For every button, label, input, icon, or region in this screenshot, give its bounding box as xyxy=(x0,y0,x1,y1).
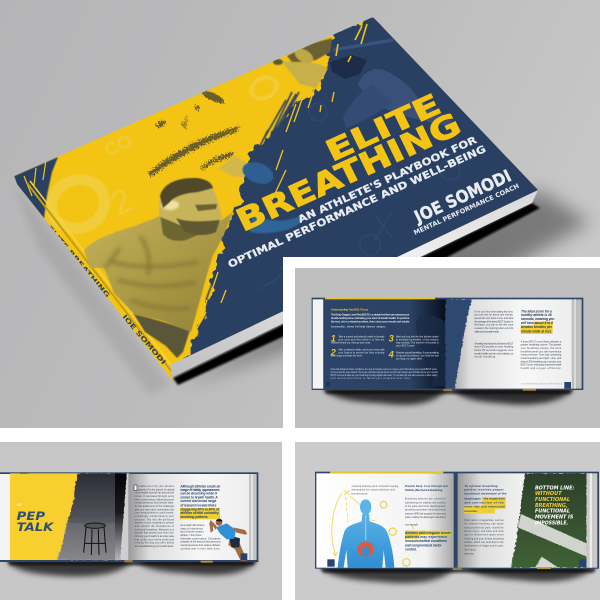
pull quote: comes to breath health. A xyxy=(180,495,218,499)
yellow brush streaks on navy xyxy=(196,24,367,330)
navy diagonal field xyxy=(170,17,560,375)
book shadow xyxy=(14,185,590,395)
bottom line statement: BREATHING, xyxy=(535,503,568,509)
highlight xyxy=(405,531,451,539)
left page sub-heading: Breathe Deep: Core Strength and xyxy=(405,485,448,488)
stool photo xyxy=(57,473,127,560)
right page second column xyxy=(521,340,562,370)
right page first column: the future, you can do the test once xyxy=(474,324,514,327)
left page body xyxy=(405,498,447,526)
trousers xyxy=(133,313,190,358)
hair xyxy=(160,178,213,208)
pull quote: The ideal score for a xyxy=(521,309,552,313)
left page note xyxy=(331,368,438,380)
right page second column: health and oxygen efficiency. xyxy=(521,367,562,370)
page stack xyxy=(249,474,257,560)
chapter number: 01 xyxy=(17,503,21,507)
cover subtitle: OPTIMAL PERFORMANCE AND WELL-BEING xyxy=(226,144,488,271)
right page body: pain to themselves upper-chest xyxy=(464,534,504,537)
page edge xyxy=(0,474,10,560)
author role: MENTAL PERFORMANCE COACH xyxy=(412,182,521,237)
highlight xyxy=(180,508,220,519)
pull quote: of research reveals that a xyxy=(180,503,217,507)
left page intro text: demanding the utmost patience and xyxy=(352,489,396,492)
numbered steps: After a relaxed exhale, pinch your nose with xyxy=(338,348,385,351)
dark line-art figure xyxy=(416,315,447,387)
body text column: with you may have overlooked the xyxy=(135,508,175,511)
footer: ELITE BREATHING | MENTAL PERFORMANCE xyxy=(521,382,563,385)
left page sub-heading xyxy=(405,485,448,492)
right page pull quote: diaphragm - the expansion xyxy=(464,496,505,500)
numbered steps: your nose and then allow it to flow out xyxy=(338,338,385,341)
chapter title xyxy=(17,509,55,534)
cover title xyxy=(236,93,461,232)
right page pull quote: pattern involves proper xyxy=(463,488,504,492)
right page first column: breath health and an over-reliance on xyxy=(474,352,514,355)
body text column: and overshadowing your performance. xyxy=(135,545,174,548)
body text column: infusing your breath to an elite state xyxy=(135,535,175,538)
spine title: ELITE BREATHING xyxy=(45,224,111,299)
navy slash xyxy=(445,299,472,389)
pull quote: musculoskeletal conditions xyxy=(405,539,447,543)
spray marks on yellow xyxy=(148,88,240,177)
spine author: JOE SOMODI xyxy=(120,312,168,366)
left folio xyxy=(326,382,330,387)
spine tabs xyxy=(453,568,462,570)
left page sub-heading: Stability (Mechanical Breathing) xyxy=(405,489,443,492)
left page body: maintaining the stability and mobility xyxy=(405,501,447,504)
numbered steps: too long; try again later. xyxy=(396,357,423,360)
folios xyxy=(327,559,586,567)
pull quote xyxy=(179,484,220,519)
faint gas symbols xyxy=(44,74,280,237)
right page pull quote: functional movement of the xyxy=(464,492,507,496)
faint gas symbols: 2 xyxy=(105,181,139,223)
right page body: hurdles, which can contribute to the xyxy=(464,541,504,544)
bottom line statement: FUNCTIONAL xyxy=(535,497,570,503)
second body text: athlete, I find these xyxy=(180,534,202,537)
blue ball under the title xyxy=(240,158,303,233)
numbered steps: is big and not relaxed, you held the test xyxy=(396,354,439,357)
right page highlight xyxy=(464,497,506,513)
book cover edge xyxy=(315,472,599,569)
stool xyxy=(84,523,106,555)
right page xyxy=(128,474,249,560)
left page heading: Understanding Your BOLT Score xyxy=(331,307,369,311)
right page second column: greater breathing volume. The greater xyxy=(521,344,561,347)
cover title: ELITE xyxy=(320,87,446,168)
numbered steps: 4 xyxy=(388,349,395,359)
shirt xyxy=(84,212,233,332)
runner xyxy=(209,519,247,561)
chapter title: TALK xyxy=(17,520,55,534)
upper blue athlete figure xyxy=(330,40,452,128)
right page body: heaving and poor airway breathing xyxy=(464,537,504,540)
numbered steps: may contract. The number of seconds is xyxy=(396,341,439,344)
book cover edge xyxy=(0,472,258,562)
bottom line statement: MOVEMENT IS xyxy=(535,515,574,521)
right page second column: during exercise. Over time, practicing xyxy=(521,354,562,357)
body text column: reathe life into your athletic xyxy=(138,485,175,488)
spread shadow xyxy=(320,567,597,583)
body text column: and unearth the foundations of xyxy=(135,525,174,528)
pull quote: minute while at rest. xyxy=(521,329,552,333)
right folio xyxy=(564,382,571,389)
left page note: BOLT score as it takes as your breathing is being signals decrease. Try not take the test after exercise or after eating xyxy=(331,374,438,377)
body text column: practice. Tap into the profound xyxy=(135,518,175,521)
body text column: comer. It resonates through every xyxy=(135,495,175,498)
navy left page xyxy=(323,299,447,389)
pull quote: Although athletes exude an xyxy=(179,484,220,488)
right page first column: below 20 seconds suggests poor xyxy=(474,349,513,352)
left page body: of the spine and trunk. Diaphragmatic xyxy=(405,505,447,508)
football field photo xyxy=(511,473,589,568)
right page pull quote: To optimal breathing xyxy=(464,484,498,488)
right page xyxy=(447,299,572,389)
cover subtitle: AN ATHLETE'S PLAYBOOK FOR xyxy=(296,135,479,226)
page stack xyxy=(587,473,597,568)
highlight xyxy=(521,322,553,334)
pull quote: patterns may experience xyxy=(404,535,447,539)
spine hinge xyxy=(27,183,172,372)
left page body: pressure (IAP) that supports the spine and xyxy=(405,512,446,515)
right page first column: the average of the three BOLT Scores. In xyxy=(474,320,514,323)
body text column: depths of your respiratory system xyxy=(135,522,174,525)
body text column: core irregularities in your breath, xyxy=(135,512,174,515)
pull quote xyxy=(404,531,451,552)
panel: Pep Talk spread xyxy=(0,428,295,600)
faint gas symbols: CO xyxy=(101,131,136,161)
cover subtitle xyxy=(226,135,488,271)
numbered steps: your fingers to prevent air from entering xyxy=(338,351,385,354)
left page intro: normally, then follow these steps: xyxy=(331,324,386,328)
left page body: core strength. xyxy=(405,523,419,526)
body text column: mental presence and mental state. xyxy=(135,502,174,505)
left page intro: breath-holding time, indicating your level of breath health. To perform xyxy=(331,316,410,320)
bottom line statement: WITHOUT xyxy=(535,491,562,497)
right page pull quote xyxy=(463,484,507,513)
bottom line statement: FUNCTIONAL xyxy=(535,509,570,515)
pull quote: control. xyxy=(405,548,417,552)
cover author: JOE SOMODI xyxy=(411,166,515,228)
right page first column: repeat the test twice more and take xyxy=(474,317,514,320)
numbered steps: or sensation to breathe, or the muscles xyxy=(396,338,439,341)
gutter sliver xyxy=(120,473,129,560)
left page intro text: common starting point of breath training, xyxy=(352,485,399,488)
left page xyxy=(316,473,454,568)
pull quote: Athletes with irregular breath xyxy=(404,531,451,535)
right page second column: BOLT score, indicating improved breath xyxy=(521,364,562,367)
pull quote: athletes exhibit unhealthy xyxy=(180,511,219,515)
page block xyxy=(170,190,538,377)
pull quote: staggering 60% to 80% of xyxy=(180,507,220,511)
right page first column: you can rest for about one minute, xyxy=(474,314,514,317)
right page pull quote: muscles. xyxy=(464,509,478,513)
photo of athlete on cover xyxy=(84,178,233,358)
right page xyxy=(458,473,588,568)
left page body: pelvis, making the diaphragm essential to xyxy=(405,516,446,519)
yellow cover field xyxy=(14,17,538,382)
pull quote: seconds, meaning you xyxy=(521,317,554,321)
left page note: For best results, stay relaxed. There are important signals when you first start using it and should reduce your overall xyxy=(331,371,438,374)
right page second column: nasal breathing and light, slow, and xyxy=(521,357,562,360)
left page intro xyxy=(331,313,410,328)
pull quote: can be deceiving when it xyxy=(180,492,218,496)
face xyxy=(158,188,222,226)
right page body: Draft pattern irregularities, such as xyxy=(464,519,505,522)
pull quote: will take about 6 to 8 xyxy=(521,321,553,325)
page stack xyxy=(572,299,582,389)
body text column: that uplifts your every stride and xyxy=(135,538,175,541)
yellow ribbon xyxy=(325,297,435,299)
body text column: fibre of your being, influencing your xyxy=(135,498,174,501)
arrows and shapes xyxy=(332,490,414,566)
numbered steps: Take a normal and relaxed breath in through xyxy=(338,335,385,338)
body text column: unwittingly compromising your xyxy=(135,515,174,518)
numbered steps: Resume normal breathing. If your breathing xyxy=(396,351,439,354)
right page first column: time of 25 seconds or more. Anything xyxy=(474,346,514,349)
right page body xyxy=(464,519,505,556)
body text column: As the attainment of the challenge xyxy=(135,505,175,508)
left page note: Note that athletes in these conditions, the urge to breathe comes on sooner, and it will reduce your overall BOLT score. xyxy=(331,368,438,371)
numbered steps: 1 xyxy=(331,333,336,343)
yellow duotone athlete arm at top xyxy=(273,38,332,88)
spread shadow xyxy=(323,388,573,405)
body text column: refining the way you offer ability xyxy=(135,542,175,545)
beard xyxy=(176,218,220,235)
right page body: and injury. xyxy=(464,549,477,552)
body text column xyxy=(134,485,175,548)
right page first column xyxy=(474,310,514,359)
pull quote: breathing patterns. xyxy=(180,515,208,519)
pull quote: breaths breaths per xyxy=(521,325,553,329)
numbered steps: your lungs and start the timer. xyxy=(331,355,363,358)
right page pull quote: and contraction of the xyxy=(464,500,504,504)
right page second column: breathlessness you will experience xyxy=(521,350,562,353)
body text column: functional breathing. Welcome to a xyxy=(135,528,175,531)
right page body: stress injury, and back and neck xyxy=(464,530,505,533)
right page second column: A lower BOLT score likely indicates a xyxy=(521,340,562,343)
right page first column: wake up for accurate results. xyxy=(474,330,500,333)
pull quote: image of vitality, appearances xyxy=(180,488,220,492)
panel: anatomy spread xyxy=(295,442,599,590)
second body text xyxy=(180,524,221,550)
human anatomy figure xyxy=(338,499,394,568)
bottom line statement: IMPOSSIBLE. xyxy=(535,521,568,527)
second body text: mental pressures that student-athletes xyxy=(180,544,221,547)
book cover mockup xyxy=(14,17,590,395)
second body text: estimates conservative. Coronaries xyxy=(180,537,221,540)
left page intro: the test, sit in a relaxed position, then close your mouth and exhale xyxy=(331,319,410,323)
yellow ribbon xyxy=(330,471,443,473)
pull quote: and compromised motor xyxy=(405,543,442,547)
bottom line statement: BOTTOM LINE: xyxy=(535,486,574,492)
yellow page xyxy=(10,473,125,560)
second body text: As a coach with sixteen xyxy=(180,524,205,527)
numbered steps: your BOLT score. xyxy=(396,345,416,348)
left page note: and record your score to follow your progress over time. xyxy=(331,377,411,380)
left page intro text: perseverance. xyxy=(352,492,369,495)
body text column: lunch health extends far beyond the xyxy=(135,492,175,495)
body text column: domain that ignites your inner fire, xyxy=(135,532,174,535)
right page body: and more. xyxy=(464,553,475,556)
left page intro: The Body Oxygen Level Test (BOLT) is a simple tool that can measure your xyxy=(331,313,409,317)
right page pull quote: inner ribs and intercostal xyxy=(464,505,505,509)
front cover and spine xyxy=(14,17,560,382)
cover title: BREATHING xyxy=(231,107,467,239)
spread shadow xyxy=(7,560,257,576)
numbered steps xyxy=(330,333,439,360)
right page first column: a week in the morning when you first xyxy=(474,327,514,330)
face highlight xyxy=(161,200,179,210)
numbered steps: 2 xyxy=(330,347,337,357)
right page second column: your breathing volume, the more xyxy=(521,347,562,350)
left page intro text xyxy=(352,485,399,495)
book cover edge xyxy=(312,298,583,390)
neck xyxy=(160,214,200,242)
right page first column: mouth breathing. xyxy=(474,356,496,359)
right page first column: If it is your first time taking this test, xyxy=(474,310,514,313)
second body text: contend with in their daily lives. xyxy=(180,547,221,550)
bottom line statement xyxy=(535,486,574,527)
right page first column: A healthy individual should have a BOLT xyxy=(474,342,514,345)
numbered steps: 3 xyxy=(389,333,395,343)
pull quote: healthy athlete is 40 xyxy=(521,313,552,317)
play diagram pattern xyxy=(260,103,460,290)
right page body: for shallow breathing, can cause xyxy=(464,523,504,526)
left page edges xyxy=(313,299,323,389)
numbered steps: relaxed breath out, then go your nose. xyxy=(331,341,371,344)
second body text: years of experience xyxy=(180,527,204,530)
pull quote xyxy=(521,309,554,333)
left page body: breathing generates intra-abdominal xyxy=(405,509,446,512)
right page second column: deep (LSD) breathing can increase your xyxy=(521,360,561,363)
navy brush streaks on yellow xyxy=(194,92,299,352)
hand at brush edge xyxy=(218,156,250,178)
chapter title: PEP xyxy=(17,509,46,523)
second body text: and a former student xyxy=(180,531,204,534)
left page body: Breathing patterns are crucial for xyxy=(405,498,446,501)
eye shadow xyxy=(195,204,217,211)
second body text: unaware of the physical demands and xyxy=(180,541,221,544)
spine tabs xyxy=(124,560,133,562)
spine navy patch xyxy=(14,157,58,226)
right page body: musculoskeletal pain, repetitive xyxy=(464,526,504,529)
spine tabs xyxy=(443,389,452,391)
body text column: journey. For the pursuit of optimal xyxy=(137,488,175,491)
folio xyxy=(241,553,247,560)
right page body: development of trigger points, pain, xyxy=(464,545,504,548)
pull quote: current and broad range xyxy=(180,499,217,503)
numbered steps: Wait until you feel the first definite desire xyxy=(396,335,439,338)
panel: BOLT score spread xyxy=(283,257,600,442)
